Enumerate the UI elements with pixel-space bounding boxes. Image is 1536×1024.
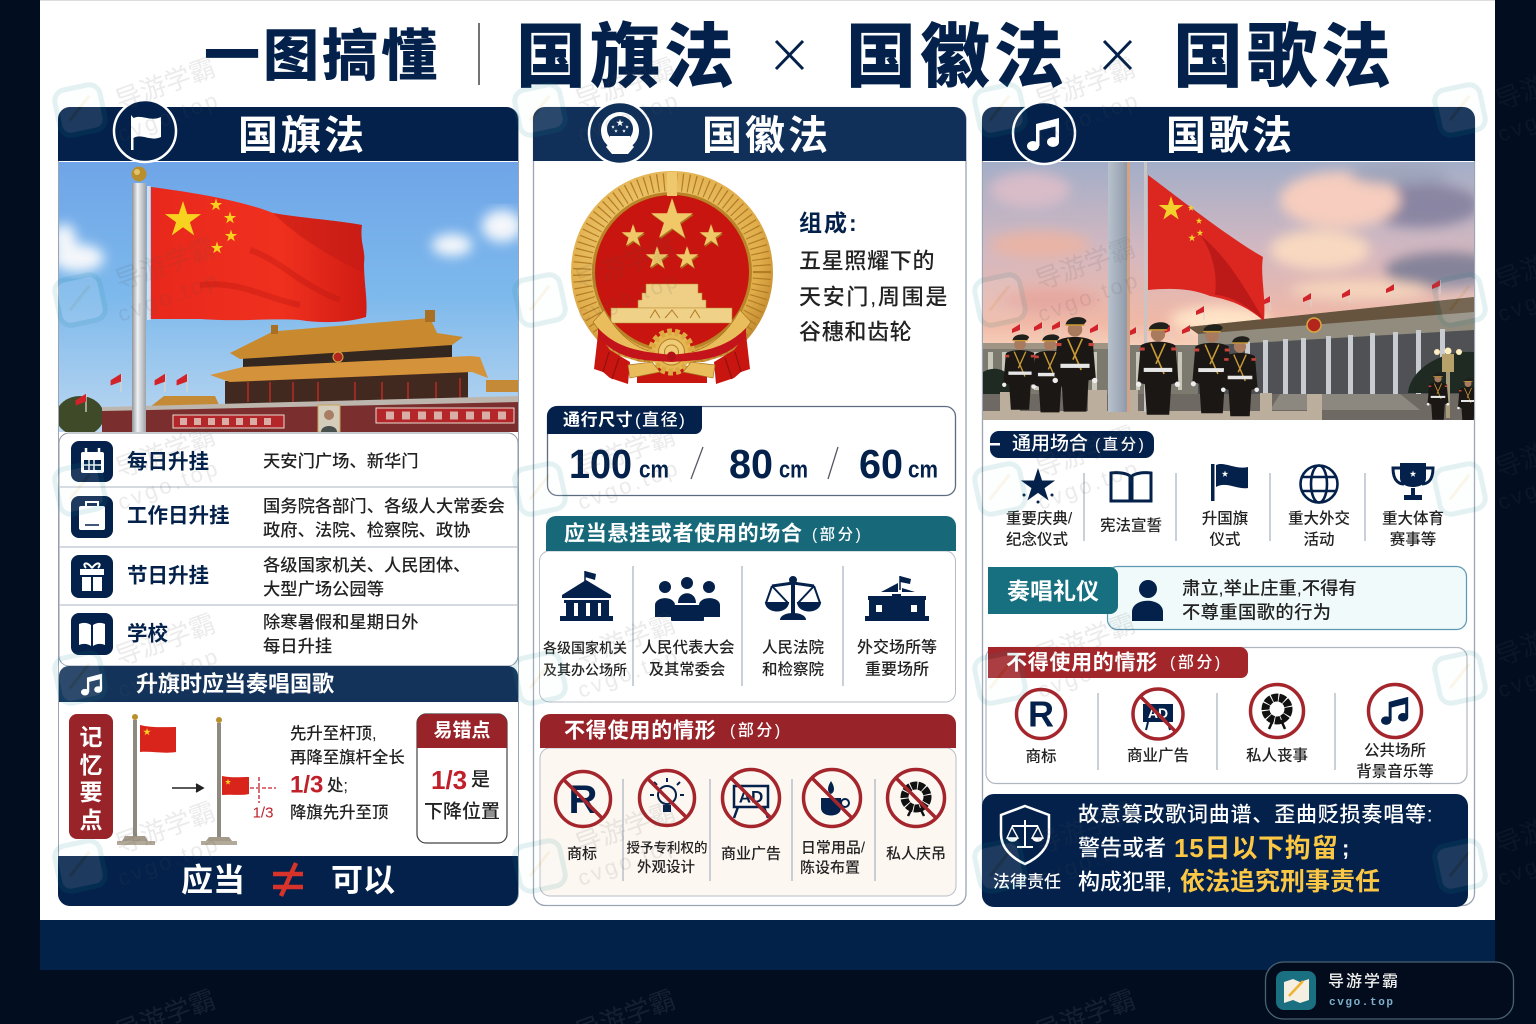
text: half mast rule: 降旗先升至顶 [290,804,388,822]
labels: 活动 [1303,530,1335,548]
text: half mast rule [290,725,405,822]
lamp [1446,352,1450,418]
box: performance etiquette: 不尊重国歌的行为 [1182,602,1331,622]
photo: flag over Tiananmen [52,162,522,436]
watermarks: cvgo.top [574,831,683,891]
watermarks: 导游学霸 [111,796,219,860]
icon: congress people [655,577,720,621]
icon: background music [1368,684,1422,738]
watermarks: cvgo.top [1034,87,1143,147]
labels: 宪法宣誓 [1100,516,1162,534]
box: standard sizes: 80 [729,441,773,487]
section: anthem prohibited uses: (部分) [1170,654,1223,672]
row: holidays: 各级国家机关、人民团体、 [263,555,470,575]
watermarks: cvgo.top [574,87,683,147]
icon: emblem badge [589,102,651,164]
icon: no private mourning [888,770,944,826]
wall [102,402,518,432]
diagram: flag at top of pole [117,714,176,845]
balustrade [983,390,1322,420]
flag [1148,175,1264,321]
callout: common mistake [417,714,507,843]
text: half mast rule: 1/3 [290,772,323,798]
band: should is not may: 应当 [181,862,245,898]
icon: trademark [1016,690,1066,738]
icon: no advertising [722,770,780,826]
callout: common mistake: 易错点 [433,720,491,742]
section: permitted uses: (部分) [812,526,863,544]
header: flag law [58,107,518,161]
text: composition: 谷穗和齿轮 [799,320,913,344]
section: permitted uses: 应当悬挂或者使用的场合 [564,522,803,546]
badge: site logo: cvgo.top [1329,997,1395,1009]
watermarks: cvgo.top [114,267,223,327]
panel: national emblem law [533,102,966,906]
callout: legal liability: 依法追究刑事责任 [1180,868,1380,896]
labels: prohibited uses: 陈设布置 [800,858,860,876]
labels: permitted uses: 及其常委会 [649,662,725,678]
national emblem [571,171,773,395]
tag: applicable occasions: (直分) [1095,436,1146,454]
title [204,18,1395,96]
text: composition [799,210,949,344]
labels: permitted uses: 各级国家机关 [543,640,627,656]
labels: permitted uses: 人民法院 [762,638,824,656]
row: daily [71,441,419,482]
callout: legal liability: 故意篡改歌词曲谱、歪曲贬损奏唱等: [1078,804,1433,826]
drapes [594,334,630,384]
badge: site logo: 导游学霸 [1328,972,1400,990]
box: standard sizes: cm [639,456,669,484]
labels: permitted uses [543,638,937,678]
labels: 商业广告 [1127,746,1189,764]
roof flags [1196,306,1204,320]
watermarks: 导游学霸 [111,420,219,484]
soldiers [1002,334,1038,410]
callout: common mistake: 1/3 [431,765,467,795]
box: standard sizes: 通行尺寸 [563,410,633,430]
box: standard sizes [547,406,956,496]
watermarks: cvgo.top [114,455,223,515]
watermarks: 导游学霸 [111,608,219,672]
panel: national flag law [52,100,522,906]
section: anthem prohibited uses [986,647,1467,784]
pole [132,183,146,432]
swag [598,328,746,362]
watermarks: 导游学霸 [111,232,219,296]
icon: advertising: AD [1148,705,1168,721]
icon: mourning [1250,684,1304,738]
watermarks: cvgo.top [1034,267,1143,327]
row: workdays [71,496,505,540]
box: performance etiquette [988,566,1466,630]
icon: globe [1300,466,1338,502]
watermarks: cvgo.top [574,455,683,515]
box: standard sizes: (直径) [635,410,686,430]
icon: trademark: R [1028,694,1054,734]
flag [151,187,367,322]
section: permitted uses [540,516,956,702]
icon: no daily goods [804,770,860,826]
labels: permitted uses: 和检察院 [762,660,824,678]
poles [1108,162,1127,412]
row: daily: 天安门广场、新华门 [263,451,419,471]
box: standard sizes: 60 [859,441,903,487]
title: 国旗法 [516,18,738,96]
watermarks: 导游学霸 [111,52,219,116]
band: sing anthem while raising flag [59,666,518,702]
box: standard sizes: cm [779,456,808,484]
icon: no trademark: R [569,778,598,822]
watermarks: 导游学霸 [1031,796,1139,860]
labels: 纪念仪式 [1006,530,1068,548]
callout: legal liability: ; [1342,836,1349,860]
watermarks: 导游学霸 [1031,420,1139,484]
labels [1025,742,1434,780]
icon: trophy [1393,463,1433,500]
labels: 商标 [1025,748,1057,766]
watermarks: 导游学霸 [571,608,679,672]
callout: legal liability [982,794,1468,907]
band: sing anthem while raising flag: 升旗时应当奏唱国歌 [136,672,334,696]
row: workdays: 工作日升挂 [127,504,230,528]
list: hoisting schedule [59,433,518,666]
row: daily: 每日升挂 [127,450,209,474]
header: flag law: 国旗法 [238,114,367,158]
text: half mast rule: 处; [327,777,348,795]
tag: memory points: 记 [80,724,102,750]
watermarks: cvgo.top [1034,455,1143,515]
header: emblem law [533,107,966,161]
watermarks: cvgo.top [1034,831,1143,891]
section: prohibited uses: 不得使用的情形 [564,720,717,742]
labels: prohibited uses: 商业广告 [721,846,781,862]
arrow [172,784,203,792]
icon: no advertising: AD [739,788,763,806]
tag: memory points: 忆 [80,752,102,778]
callout: legal liability: 15日以下拘留 [1174,833,1339,863]
labels: 仪式 [1209,530,1241,548]
labels: 重大体育 [1382,508,1444,528]
watermarks: cvgo.top [574,643,683,703]
callout: legal liability: 构成犯罪, [1078,870,1172,894]
gold bands [628,362,715,378]
callout: common mistake: 下降位置 [424,800,500,822]
labels: permitted uses: 外交场所等 [857,638,937,656]
panel: national anthem law [982,102,1505,907]
photo: flag guards at Great Hall [983,162,1505,423]
great hall [1188,297,1474,345]
labels: 重要庆典/ [1006,510,1073,528]
watermarks: cvgo.top [114,831,223,891]
section: prohibited uses: (部分) [730,722,783,740]
row: schools: 每日升挂 [263,636,332,656]
text: half mast rule: 先升至杆顶, [290,725,377,743]
labels: prohibited uses: 私人庆吊 [886,846,946,862]
icon: flag badge [114,100,176,162]
text: half mast rule: 再降至旗杆全长 [290,748,405,767]
text: composition: 五星照耀下的 [799,248,935,274]
icon: flag [1211,464,1248,501]
labels [1006,508,1444,548]
row: occasions [1006,463,1444,548]
labels: prohibited uses: 授予专利权的 [626,840,708,856]
cover below ring [585,345,759,395]
row: holidays [71,555,470,599]
title: 国徽法 [846,18,1068,96]
labels: permitted uses: 人民代表大会 [641,638,735,656]
band: should is not may: 可以 [331,862,395,898]
labels: 升国旗 [1202,510,1248,528]
left hall [983,349,1108,394]
icon: diplomatic building [865,576,929,621]
tag: applicable occasions: 通用场合 [1012,432,1088,454]
watermarks: cvgo.top [1034,643,1143,703]
watermarks: 导游学霸 [1031,608,1139,672]
icon: scales of justice [766,577,820,620]
icon: open book [1111,473,1151,501]
row: holidays: 大型广场公园等 [263,579,384,599]
icon: map logo [1276,971,1316,1010]
watermarks: 导游学霸 [571,796,679,860]
callout: legal liability: 法律责任 [993,872,1061,892]
labels: 背景音乐等 [1356,762,1434,780]
tag: memory points: 点 [80,807,102,833]
callout: legal liability: 警告或者 [1078,836,1166,860]
header: emblem law: 国徽法 [702,114,831,158]
header: anthem law: 国歌法 [1166,114,1295,158]
tag: memory points: 要 [80,779,102,805]
row: workdays: 国务院各部门、各级人大常委会 [263,496,505,516]
labels: 私人丧事 [1246,746,1308,764]
gear [652,332,692,372]
labels: 赛事等 [1390,530,1436,548]
icon: music badge [1013,102,1075,164]
icon: no trademark [556,772,610,826]
labels: 重大外交 [1288,508,1350,528]
row: schools [71,612,419,656]
trees [59,396,102,432]
icon: shield with scales [1001,806,1049,864]
diagram: flag at half mast: 1/3 [253,804,273,822]
box: standard sizes: 100 [569,441,632,487]
tag: applicable occasions [990,431,1154,458]
icon: advertising [1133,689,1183,739]
box: standard sizes: cm [908,456,938,484]
title: 国歌法 [1173,18,1395,96]
labels: prohibited uses: 外观设计 [637,859,695,876]
watermarks: 导游学霸 [571,52,679,116]
tag: memory points [69,714,113,839]
row: holidays: 节日升挂 [127,564,209,588]
watermarks: 导游学霸 [1031,232,1139,296]
row: schools: 除寒暑假和星期日外 [263,612,419,632]
badge: site logo [1266,962,1514,1019]
labels: prohibited uses: 日常用品/ [801,840,866,856]
title: 一图搞懂 [204,24,440,88]
icon: star [1021,468,1055,504]
row: workdays: 政府、法院、检察院、政协 [263,520,470,540]
text: composition: 天安门,周围是 [799,284,949,310]
watermarks: cvgo.top [114,643,223,703]
labels: prohibited uses: 商标 [567,846,597,862]
gate tower [243,345,452,367]
row: schools: 学校 [127,622,168,646]
watermarks: 导游学霸 [571,420,679,484]
labels: 公共场所 [1364,742,1426,760]
icon: government building [560,571,613,621]
box: performance etiquette: 奏唱礼仪 [1007,578,1099,604]
section: prohibited uses [540,714,956,896]
watermarks: 导游学霸 [571,232,679,296]
watermarks: 导游学霸 [1031,52,1139,116]
labels: prohibited uses [567,840,946,876]
box: performance etiquette: 肃立,举止庄重,不得有 [1182,578,1357,598]
section: anthem prohibited uses: 不得使用的情形 [1006,652,1158,674]
labels: permitted uses: 及其办公场所 [543,662,627,678]
icon: no patent design [640,770,694,826]
footer band [40,920,1495,970]
labels: permitted uses: 重要场所 [865,660,929,678]
callout: common mistake: 是 [471,770,490,790]
watermarks: cvgo.top [574,267,683,327]
text: composition: 组成: [799,210,859,236]
watermarks: cvgo.top [114,87,223,147]
diagram: flag at half mast [201,717,276,845]
band: should is not may [58,856,518,906]
side building [152,396,219,406]
header: anthem law [982,107,1475,161]
wheat sweeps [593,310,652,362]
